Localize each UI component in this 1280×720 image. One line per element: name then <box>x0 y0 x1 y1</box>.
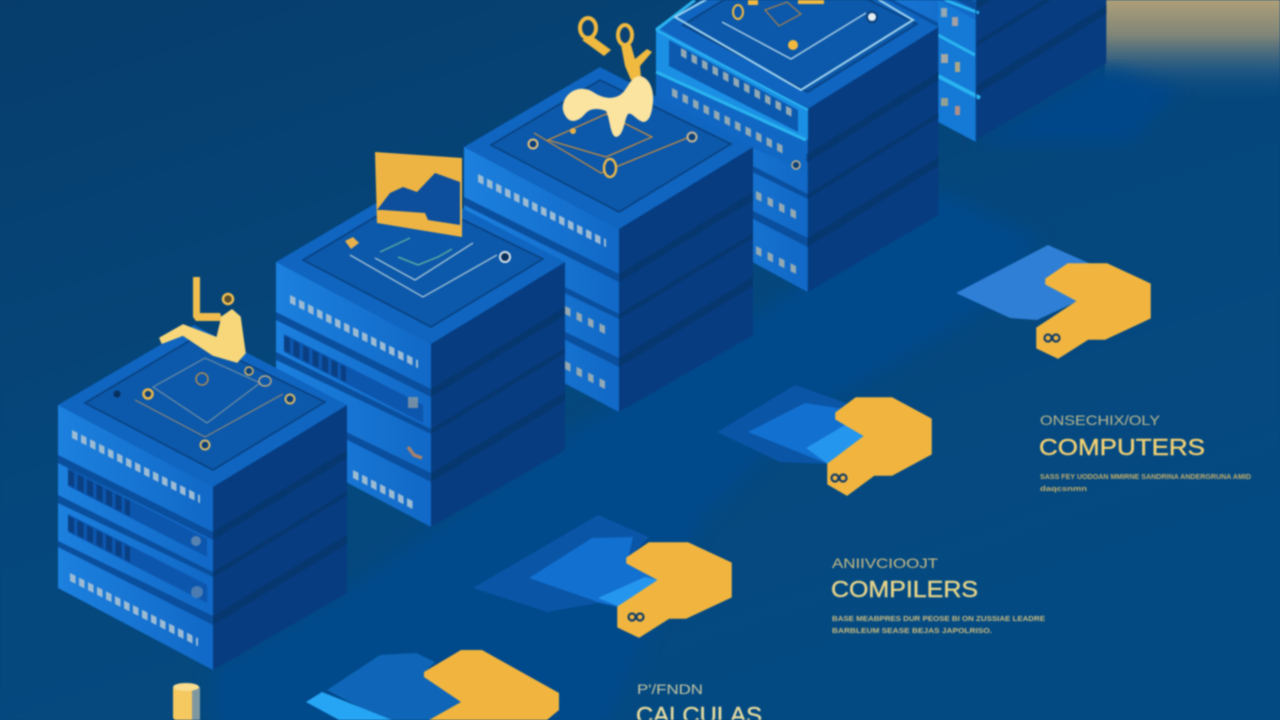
text block: calculas: P'/FNDN <box>637 681 703 697</box>
text block: compilers: COMPILERS <box>831 576 978 602</box>
text block: compilers: BASE MEABPRES DUR PEOSE BI ON ZUSSIAE LEADRE <box>832 614 1045 623</box>
text block: computers: daqcsnmn <box>1040 484 1088 493</box>
text block: computers <box>1039 412 1252 493</box>
text block: compilers: ANIIVCIOOJT <box>832 555 939 571</box>
text block: compilers <box>831 555 1045 635</box>
text block: computers: SASS FEY UODOAN MMIRNE SANDRINA ANDERGRUNA AMID <box>1040 472 1252 481</box>
cream glow in the top right corner <box>1105 0 1280 100</box>
icon: python block 2 <box>717 385 931 495</box>
server stack 1 (front) <box>58 325 347 670</box>
icon: robot arm on stack 1 <box>160 277 245 362</box>
icon: python block 3 <box>473 515 731 637</box>
text block: computers: ONSECHIX/OLY <box>1040 412 1161 428</box>
floor shadow of the rear stack <box>975 67 1180 143</box>
floor shadow of the server stacks <box>213 190 1040 720</box>
text block: calculas <box>636 681 762 720</box>
server stack 2 <box>276 182 565 527</box>
icon: robot arm on stack 3 <box>563 18 653 137</box>
server stack 4 <box>656 0 938 292</box>
yellow card with cloud <box>375 152 462 237</box>
icon: python block 1 <box>956 245 1150 358</box>
icon: yellow cylinder <box>173 683 200 720</box>
text block: computers: COMPUTERS <box>1039 434 1205 460</box>
icon: python block 4 <box>306 650 559 720</box>
server stack 5 (rear) <box>825 0 1106 142</box>
server stack 3 <box>464 67 753 412</box>
text block: compilers: BARBLEUM SEASE BEJAS JAPOLRISO. <box>832 626 992 635</box>
